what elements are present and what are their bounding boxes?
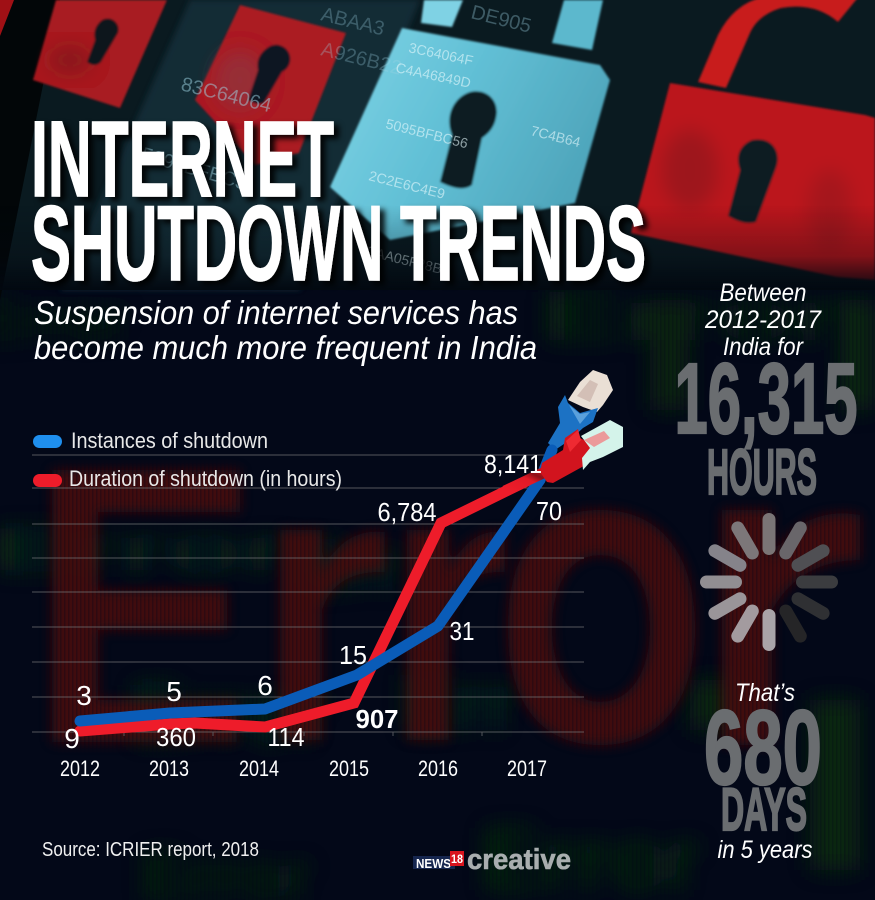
background: lower panel with blurred error text: Error xyxy=(130,668,326,757)
subtitle: become much more frequent in India xyxy=(34,329,537,366)
stat text: 16,315 hours: Between xyxy=(720,279,806,307)
line chart: duration of shutdown xyxy=(80,472,545,731)
data labels: instances xyxy=(76,496,562,711)
icon: blue network cable connector xyxy=(548,370,613,450)
header photo: padlocks: 3C64064F xyxy=(407,39,475,69)
hex characters on the padlocks: A926B22 xyxy=(319,39,404,80)
x-axis years: 2012 xyxy=(60,756,100,781)
x-axis years xyxy=(60,756,547,781)
subtitle: Suspension of internet services has xyxy=(34,294,518,331)
data labels: duration: 907 xyxy=(356,704,398,734)
stat text: 16,315 hours: 2012-2017 xyxy=(704,306,822,334)
data labels: duration: 360 xyxy=(156,722,196,752)
legend: Instances of shutdown xyxy=(71,428,268,453)
logo: News18 Creative: creative xyxy=(467,844,571,876)
stat text: 16,315 hours: India for xyxy=(723,333,804,361)
data labels: duration: 114 xyxy=(268,722,304,752)
x-axis years: 2017 xyxy=(507,756,547,781)
logo: News18 Creative: NEWS xyxy=(416,856,451,871)
header photo: padlocks: CAA05F28B xyxy=(364,242,444,277)
x-axis years: 2015 xyxy=(329,756,369,781)
hex characters on the padlocks: DE905 xyxy=(469,2,533,38)
logo: News18 Creative: 18 xyxy=(451,852,463,866)
source: Source: ICRIER report, 2018 xyxy=(42,839,259,861)
stat text: 680 days xyxy=(704,679,822,864)
subtitle xyxy=(34,294,537,366)
title: INTERNET xyxy=(31,98,334,219)
data labels: duration: 6,784 xyxy=(378,497,436,527)
logo: News18 Creative xyxy=(413,844,571,876)
header photo: padlocks: 7C4B64 xyxy=(529,122,582,150)
legend: Duration of shutdown (in hours) xyxy=(69,466,342,491)
background: lower panel with blurred error text: Err xyxy=(300,527,401,605)
stat text: 680 days: That’s xyxy=(735,679,795,707)
icon: second red padlock xyxy=(195,5,346,165)
stat text: 680 days: in 5 years xyxy=(718,836,812,864)
data labels: instances: 70 xyxy=(536,496,562,526)
data labels: duration: 9 xyxy=(64,723,80,754)
legend xyxy=(33,428,342,491)
line chart: instances of shutdown xyxy=(80,450,552,721)
x-axis years: 2016 xyxy=(418,756,458,781)
header photo: padlocks: 5095BFBC56 xyxy=(384,115,470,151)
background: lower panel with blurred error text: Err xyxy=(400,658,516,747)
hex characters on the padlocks: ABAA3 xyxy=(319,4,387,40)
title xyxy=(31,98,646,303)
icon: loading spinner xyxy=(706,520,832,644)
icon: open red padlock xyxy=(631,0,875,280)
x-axis years: 2013 xyxy=(149,756,189,781)
data labels: duration: 8,141 xyxy=(484,449,542,479)
data labels: instances: 3 xyxy=(76,680,92,711)
hex characters on the padlocks: 5095BFBC5 xyxy=(139,144,249,195)
background: lower panel with blurred error text: Error xyxy=(540,277,840,355)
x-axis years: 2014 xyxy=(239,756,279,781)
data labels: instances: 15 xyxy=(339,640,367,670)
icon: red network cable connector xyxy=(505,420,623,491)
hex characters on the padlocks xyxy=(139,2,533,195)
header photo: padlocks xyxy=(0,0,875,300)
data labels: duration xyxy=(64,449,542,754)
data labels: instances: 31 xyxy=(450,616,474,646)
header photo: padlocks: C4A46849D xyxy=(394,59,472,91)
icon: blue padlock xyxy=(330,0,610,240)
icon: small red padlock xyxy=(33,0,167,108)
data labels: instances: 5 xyxy=(166,676,182,707)
background: lower panel with blurred error text xyxy=(0,277,875,900)
data labels: instances: 6 xyxy=(257,670,273,701)
header photo: padlocks: 2C2E6C4E9 xyxy=(367,167,447,202)
hex characters on the padlocks: 83C64064 xyxy=(179,74,274,117)
stat text: 16,315 hours xyxy=(674,279,858,508)
chart gridlines xyxy=(32,455,584,736)
